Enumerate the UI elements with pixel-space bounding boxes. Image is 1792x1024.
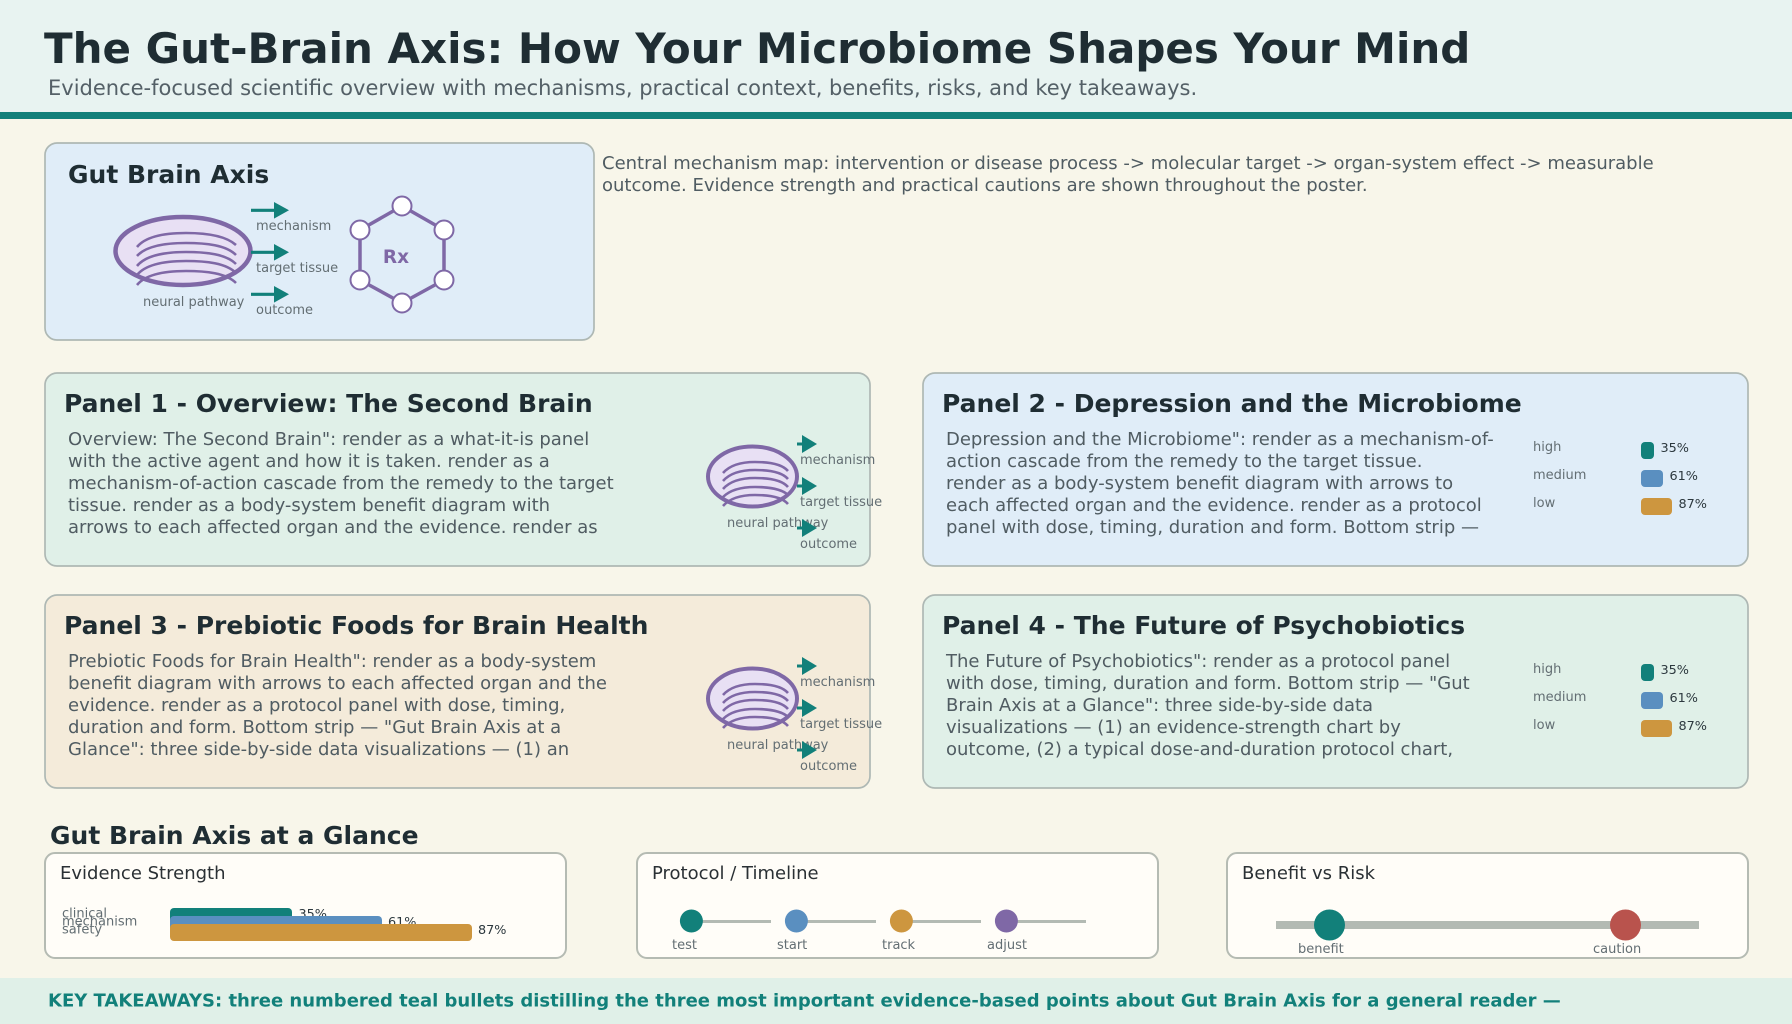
card: protocol timeline: start [777, 938, 807, 953]
header band [0, 0, 1792, 119]
panel 1 gut diagram [708, 435, 882, 552]
card: benefit vs risk: caution [1593, 942, 1641, 957]
panel 2 body: action cascade from the remedy to the target tissue. [946, 451, 1422, 472]
card: evidence strength chart: 35% [298, 907, 327, 922]
panel 2 body [946, 429, 1494, 538]
diagram labels: neural pathway [143, 295, 245, 310]
panel 1 heading: Panel 1 - Overview: The Second Brain [64, 389, 593, 418]
panel 4 bar chart: medium [1533, 690, 1586, 705]
diagram labels: outcome [256, 303, 313, 318]
card: benefit vs risk: benefit [1298, 942, 1344, 957]
panel 1 body: tissue. render as a body-system benefit diagram with [68, 495, 550, 516]
card: protocol timeline: track [882, 938, 916, 953]
card: evidence strength chart: mechanism [62, 914, 137, 930]
panel 3 body: benefit diagram with arrows to each affected organ and the [68, 673, 607, 694]
panel 3 body: Glance": three side-by-side data visualizations — (1) an [68, 739, 569, 760]
panel 1 gut diagram: target tissue [800, 495, 882, 510]
card: protocol timeline: Protocol / Timeline [652, 863, 819, 884]
panel 3 gut diagram: outcome [800, 759, 857, 774]
diagram labels [143, 219, 338, 318]
panel 3 gut diagram: target tissue [800, 717, 882, 732]
panel 2 body: panel with dose, timing, duration and form. Bottom strip — [946, 517, 1479, 538]
diagram labels: target tissue [256, 261, 338, 276]
title: The Gut-Brain Axis: How Your Microbiome Shapes Your Mind [44, 24, 1470, 73]
icon: molecule hexagon: Rx [383, 247, 409, 268]
panel 2 body: each affected organ and the evidence. render as a protocol [946, 495, 1482, 516]
panel 3 heading: Panel 3 - Prebiotic Foods for Brain Health [64, 611, 648, 640]
panel 4 [923, 595, 1748, 788]
intro text: Central mechanism map: intervention or disease process -> molecular target -> organ-system effect -> measurable [602, 153, 1654, 174]
panel 3 body [68, 651, 607, 760]
panel 3 body: duration and form. Bottom strip — "Gut Brain Axis at a [68, 717, 561, 738]
panel 4 heading: Panel 4 - The Future of Psychobiotics [942, 611, 1465, 640]
panel 4 body: The Future of Psychobiotics": render as a protocol panel [945, 651, 1450, 672]
panel 3 body: evidence. render as a protocol panel with dose, timing, [68, 695, 565, 716]
hero heading: Gut Brain Axis [68, 160, 269, 189]
card: protocol timeline: test [672, 938, 697, 953]
panel 2 body: Depression and the Microbiome": render as a mechanism-of- [946, 429, 1494, 450]
panel 1 [45, 373, 882, 566]
panel 1 body: mechanism-of-action cascade from the remedy to the target [68, 473, 614, 494]
panel 3 gut diagram [708, 657, 882, 774]
card: evidence strength chart: 61% [388, 915, 416, 930]
panel 4 body [945, 651, 1470, 760]
icon: gut [116, 217, 250, 285]
panel 2 bar chart: 61% [1670, 469, 1698, 484]
panel 2 bar chart: low [1533, 496, 1556, 511]
panel 2 bar chart: high [1533, 440, 1561, 455]
panel 4 body: visualizations — (1) an evidence-strength chart by [946, 717, 1401, 738]
panel 1 gut diagram: mechanism [800, 453, 875, 468]
panel 4 body: outcome, (2) a typical dose-and-duration protocol chart, [946, 739, 1453, 760]
panel 4 bar chart: 35% [1660, 663, 1689, 678]
panel 1 body: with the active agent and how it is taken. render as a [68, 451, 550, 472]
panel 2 bar chart: 35% [1660, 441, 1689, 456]
panel 4 body: with dose, timing, duration and form. Bottom strip — "Gut [946, 673, 1470, 694]
panel 1 body: Overview: The Second Brain": render as a what-it-is panel [68, 429, 589, 450]
section heading: Gut Brain Axis at a Glance [50, 821, 419, 850]
panel 3 gut diagram: mechanism [800, 675, 875, 690]
panel 1 gut diagram: neural pathway [727, 516, 829, 531]
panel 1 body: arrows to each affected organ and the evidence. render as [68, 517, 598, 538]
key takeaways strip: KEY TAKEAWAYS: three numbered teal bullets distilling the three most important evidence-based points about Gut Brain Axis for a general reader — [48, 990, 1561, 1012]
panel 1 gut diagram: outcome [800, 537, 857, 552]
panel 4 bar chart [1533, 662, 1707, 737]
panel 3 body: Prebiotic Foods for Brain Health": render as a body-system [68, 651, 596, 672]
key takeaways strip [0, 978, 1792, 1024]
panel 2 bar chart [1533, 440, 1707, 515]
subtitle: Evidence-focused scientific overview with mechanisms, practical context, benefits, risks, and key takeaways. [48, 76, 1197, 100]
arrows: mechanism, target tissue, outcome [251, 202, 289, 303]
card: benefit vs risk: Benefit vs Risk [1242, 863, 1376, 884]
card: evidence strength chart: 87% [478, 923, 506, 938]
panel 4 body: Brain Axis at a Glance": three side-by-side data [946, 695, 1373, 716]
panel 2 heading: Panel 2 - Depression and the Microbiome [942, 389, 1522, 418]
panel 4 bar chart: 87% [1678, 719, 1707, 734]
card: protocol timeline: adjust [987, 938, 1027, 953]
icon: molecule hexagon [350, 196, 454, 312]
panel 4 bar chart: 61% [1670, 691, 1698, 706]
card: evidence strength chart: clinical [62, 906, 107, 922]
panel 3 [45, 595, 882, 788]
panel 1 body [68, 429, 614, 538]
card: benefit vs risk [1227, 853, 1748, 958]
panel 2 body: render as a body-system benefit diagram with arrows to [946, 473, 1453, 494]
panel 4 bar chart: low [1533, 718, 1556, 733]
card: evidence strength chart: Evidence Strength [60, 863, 226, 884]
panel 3 gut diagram: neural pathway [727, 738, 829, 753]
panel 4 bar chart: high [1533, 662, 1561, 677]
card: protocol timeline [637, 853, 1158, 958]
panel 2 bar chart: 87% [1678, 497, 1707, 512]
intro text: outcome. Evidence strength and practical cautions are shown throughout the poster. [602, 175, 1368, 196]
diagram labels: mechanism [256, 219, 331, 234]
card: evidence strength chart [45, 853, 566, 958]
card: evidence strength chart: safety [62, 922, 102, 938]
intro text [602, 153, 1654, 196]
panel: hero Gut Brain Axis [45, 143, 594, 340]
panel 2 [923, 373, 1748, 566]
panel 2 bar chart: medium [1533, 468, 1586, 483]
